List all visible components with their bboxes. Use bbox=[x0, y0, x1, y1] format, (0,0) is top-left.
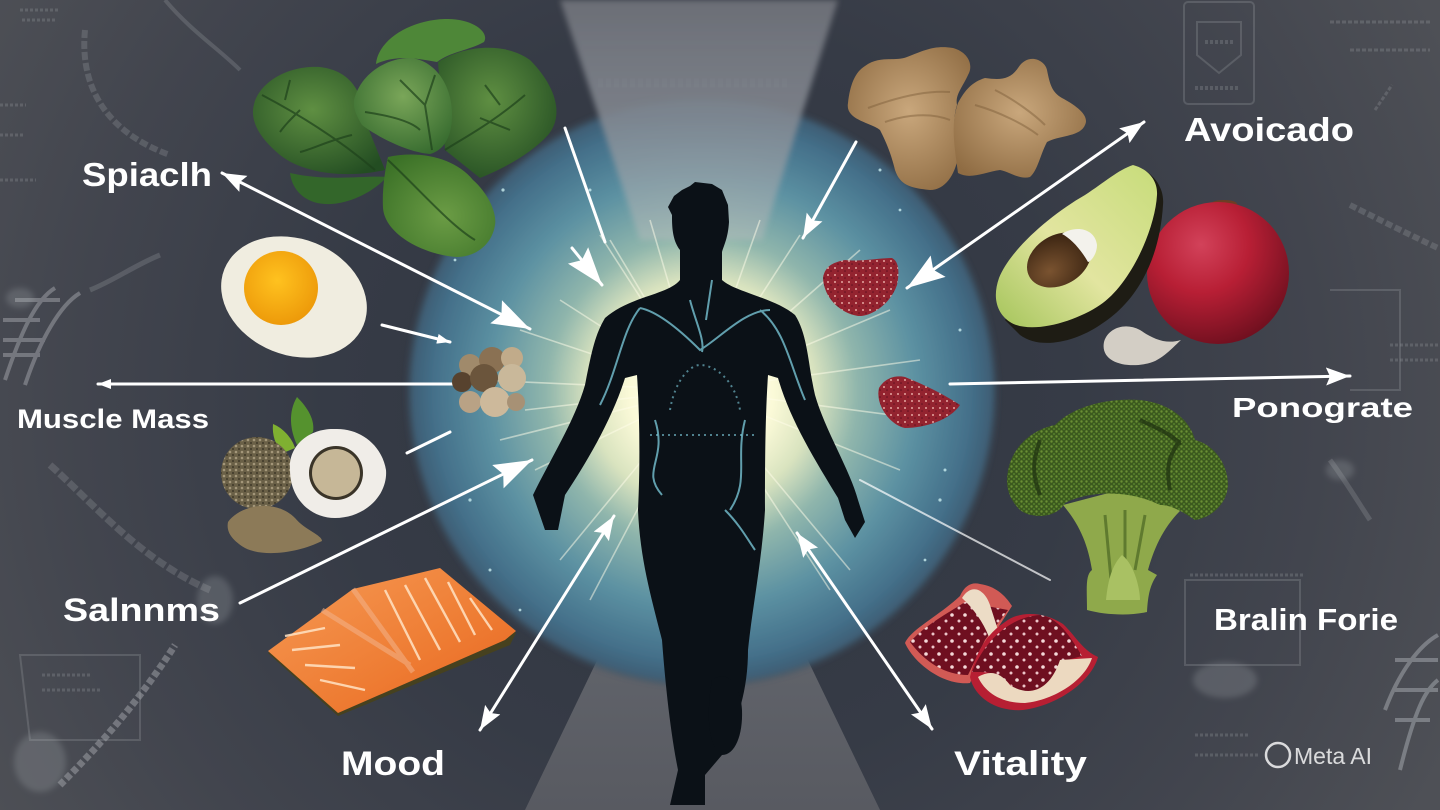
arrow: egg bbox=[382, 325, 450, 342]
icon: walnuts bbox=[452, 347, 526, 417]
label: Mood: Mood bbox=[341, 745, 445, 783]
icon: avocado and pomegranate bbox=[996, 165, 1289, 365]
ray: broccoli bbox=[860, 480, 1050, 580]
piece right bbox=[970, 614, 1098, 710]
leaf: lower small bbox=[290, 173, 387, 204]
label: Spinach: Spiaclh bbox=[82, 156, 212, 193]
leaf: left bbox=[253, 67, 385, 174]
icon: spinach bbox=[253, 19, 556, 257]
glowing energy halo bbox=[404, 94, 1000, 690]
arrow: pomegranate label bbox=[950, 376, 1350, 384]
label: Brain Force: Bralin Forie bbox=[1214, 602, 1398, 637]
icon: pomegranate open bbox=[905, 583, 1098, 710]
top light beam bbox=[560, 0, 838, 240]
stalk bbox=[1063, 490, 1183, 614]
arrow: mood bbox=[480, 516, 614, 730]
leaf: bottom bbox=[383, 155, 495, 257]
arrow: spinach label to body bbox=[222, 173, 530, 329]
wedge upper bbox=[823, 258, 898, 316]
arrow: avocado bbox=[907, 122, 1144, 288]
label: Vitality: Vitality bbox=[954, 745, 1087, 783]
arrow: ginger bbox=[803, 142, 856, 238]
icon: broccoli bbox=[1007, 400, 1228, 614]
light rays bbox=[480, 220, 930, 600]
label: Muscle Mass: Muscle Mass bbox=[17, 404, 209, 434]
arrow: vitality bbox=[797, 533, 932, 729]
leaf: top bbox=[376, 19, 485, 64]
wedge lower bbox=[878, 376, 960, 428]
arrow: spinach to body short bbox=[565, 128, 605, 242]
icon: ginger root bbox=[848, 47, 1086, 190]
human silhouette bbox=[533, 182, 865, 805]
icon: egg bbox=[203, 215, 385, 379]
watermark: Meta AI: Meta AI bbox=[1294, 743, 1372, 769]
piece left bbox=[905, 583, 1012, 683]
arrow: down to body bbox=[572, 248, 602, 285]
icon: ginger bands bbox=[868, 90, 1045, 135]
icon: shell and nuts bbox=[221, 397, 386, 553]
label: Avocado: Avoicado bbox=[1184, 111, 1354, 148]
icon: pomegranate pieces bbox=[823, 258, 960, 428]
label: Salmon: Salnnms bbox=[63, 592, 220, 628]
arrows bbox=[98, 122, 1350, 730]
arrow: nuts bbox=[407, 432, 450, 453]
florets bbox=[1007, 400, 1228, 520]
glowing body lines bbox=[600, 280, 805, 550]
label: Pomegranate: Ponograte bbox=[1232, 392, 1413, 423]
icon: salmon fillet bbox=[268, 568, 516, 716]
star specks bbox=[454, 168, 962, 611]
leaf: right bbox=[438, 48, 556, 178]
arrow: salmon label bbox=[240, 460, 532, 603]
bottom beam bbox=[525, 540, 880, 810]
leaf: centre bbox=[354, 58, 452, 154]
decorative pale blobs bbox=[6, 288, 1354, 792]
arrow: muscle mass bbox=[98, 382, 455, 386]
